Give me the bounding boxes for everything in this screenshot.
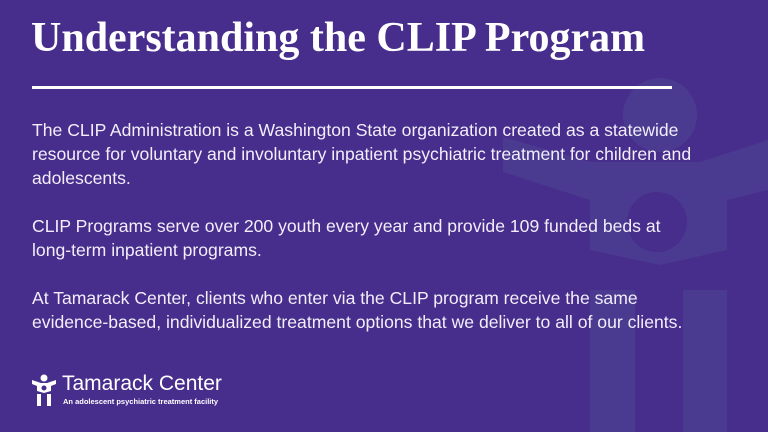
- text block: body: adolescents.: [32, 168, 131, 188]
- logo text: Tamarack Center: [62, 372, 222, 395]
- logo: An adolescent psychiatric treatment facility: [63, 397, 218, 406]
- title: Understanding the CLIP Program: [31, 15, 645, 61]
- text block: body: resource for voluntary and involuntary inpatient psychiatric treatment for children and: [32, 144, 691, 164]
- text block: body: [32, 120, 691, 332]
- text block: body: At Tamarack Center, clients who enter via the CLIP program receive the same: [32, 288, 638, 308]
- divider line: [32, 86, 672, 89]
- text block: body: The CLIP Administration is a Washington State organization created as a statewide: [32, 120, 678, 140]
- text block: body: evidence-based, individualized treatment options that we deliver to all of our clients.: [32, 312, 682, 332]
- text block: body: CLIP Programs serve over 200 youth every year and provide 109 funded beds at: [32, 216, 661, 236]
- logo: [32, 372, 222, 406]
- text block: body: long-term inpatient programs.: [32, 240, 262, 260]
- icon: logo figure: [32, 374, 56, 406]
